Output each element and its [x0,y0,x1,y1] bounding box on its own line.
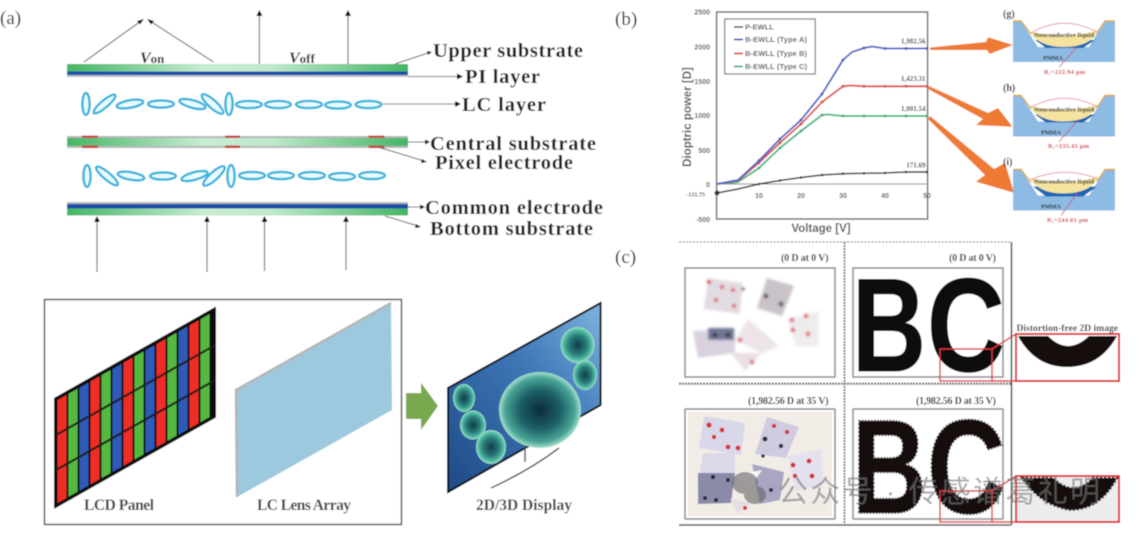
LCD panel pixel grid [54,306,216,509]
x tick labels: 20 [797,193,805,200]
y tick labels: 1500 [694,79,710,86]
panel: (c) imaging comparison [615,242,1119,536]
data labels: 1,001.54 [901,105,926,113]
data labels: -131.75 [686,192,705,198]
label: Distortion-free 2D image: Distortion-free 2D image [1016,324,1118,334]
y tick labels: 2000 [694,44,710,52]
central substrate with pixel electrodes [67,136,408,148]
label: Central substrate: Central substrate [430,133,596,155]
light rays below [94,216,349,272]
panel: (b) dioptric power chart [615,9,1115,235]
label: (b): (b) [615,9,637,30]
inset: jagged crop [1016,476,1119,522]
curve: B-EWLL Type B [717,85,928,184]
caption bottom-right: (1,982.56 D at 35 V) [916,396,996,407]
label: V on: Von [140,50,165,67]
x tick labels: 40 [881,193,889,200]
LC layer, upper [82,92,382,116]
y tick labels: 2500 [694,10,710,16]
label (h) and radius [1003,83,1090,150]
caption bottom-left: (1,982.56 D at 35 V) [748,396,829,407]
red zoom box, upper [940,334,1016,381]
lens diagram (h) [1013,96,1115,142]
label: PI layer: PI layer [465,66,540,88]
LC layer, lower [83,164,385,188]
panel: LCD panel plus lens array to 2D/3D display [44,300,601,524]
label (i) and radius [1003,157,1089,224]
sample: BC letters at 35 V, jagged [852,392,1005,536]
light rays above [84,10,351,64]
label (i) and radius: R₁=244.01 μm [1047,217,1089,224]
inset: distortion-free crop [1016,334,1119,381]
label (g) and radius [1003,9,1086,76]
y axis title: Dioptric power [D] [682,67,694,167]
LC lens array [236,303,392,497]
red zoom box, lower [940,476,1016,522]
leader arrows [378,51,463,228]
x tick labels: 30 [839,193,847,200]
x tick labels [755,193,931,200]
lens diagram (g): Nonconductive liquid [1034,32,1094,39]
label: LCD Panel: LCD Panel [84,497,155,514]
label: (a): (a) [0,8,21,29]
caption top-left: (0 D at 0 V) [781,253,829,264]
y tick labels: 1000 [694,113,710,120]
label (g) and radius: (g) [1003,9,1015,20]
label (h) and radius: R₁=235.45 μm [1048,143,1090,150]
legend [725,19,815,74]
panel: (a) liquid crystal lens cross-section [0,8,603,272]
data labels [686,38,926,198]
label: 2D/3D Display: 2D/3D Display [476,497,572,514]
curve: B-EWLL Type C [717,114,928,184]
label (g) and radius: R₁=222.94 μm [1044,69,1086,76]
arrow: to lens h [928,86,1012,127]
label (h) and radius: (h) [1003,83,1015,94]
label: V off: Voff [289,50,316,67]
legend: P-EWLL [745,22,774,32]
upper substrate layers [67,64,408,77]
icon: chat bubbles [732,472,766,504]
bottom substrate and common electrode [67,202,408,216]
legend: B-EWLL (Type B) [745,49,808,58]
label: LC Lens Array: LC Lens Array [257,497,351,514]
data labels: 1,423.31 [901,75,926,83]
data labels: 1,982.56 [901,38,926,46]
legend: B-EWLL (Type A) [745,35,808,44]
arrow: green [406,383,438,430]
lens diagram (h): Nonconductive liquid [1034,106,1094,114]
label: LC layer: LC layer [462,94,546,116]
lens diagram (g) [1013,21,1115,67]
zero line [717,183,927,185]
label: (c): (c) [615,247,636,268]
y tick labels: 500 [698,148,710,155]
lens diagram (i): PMMA [1041,204,1061,210]
lens diagram (i): Nonconductive liquid [1034,178,1094,186]
label: Bottom substrate: Bottom substrate [430,218,593,240]
sample: BC letters at 0 V [852,250,1005,400]
label: Pixel electrode: Pixel electrode [435,152,573,174]
x axis title: Voltage [V] [791,223,851,235]
lens diagram (i) [1013,170,1115,216]
curve: P-EWLL [715,171,928,195]
caption top-right: (0 D at 0 V) [949,253,996,264]
label (i) and radius: (i) [1003,157,1012,168]
arrow: to lens i [928,116,1014,193]
data labels: 171.69 [906,162,926,170]
system frame [44,300,402,524]
2D/3D display monitor [448,303,601,492]
watermark text: 公众号 · 传感谱葛礼明 [778,476,1100,509]
lens diagram (g): PMMA [1043,55,1063,62]
curve: B-EWLL Type A [717,46,928,184]
plot frame [717,12,928,219]
photo: focused dice at 35 V [685,409,835,519]
grid lines [679,242,1012,525]
photo: blurred dice at 0 V [685,268,835,377]
lens diagram (h): PMMA [1041,130,1061,136]
sample: BC letters at 0 V: C [927,250,1005,400]
y tick labels: 0 [706,182,710,189]
arrow: to lens g [930,37,1013,54]
y tick labels [694,10,710,224]
x tick labels: 10 [755,193,763,200]
label: Common electrode: Common electrode [425,197,603,219]
x tick labels: 50 [923,193,931,200]
sample: BC letters at 0 V: B [852,252,926,400]
label: Upper substrate: Upper substrate [433,40,583,62]
y tick labels: -500 [696,217,710,224]
legend: B-EWLL (Type C) [745,62,808,71]
watermark [732,472,1100,509]
